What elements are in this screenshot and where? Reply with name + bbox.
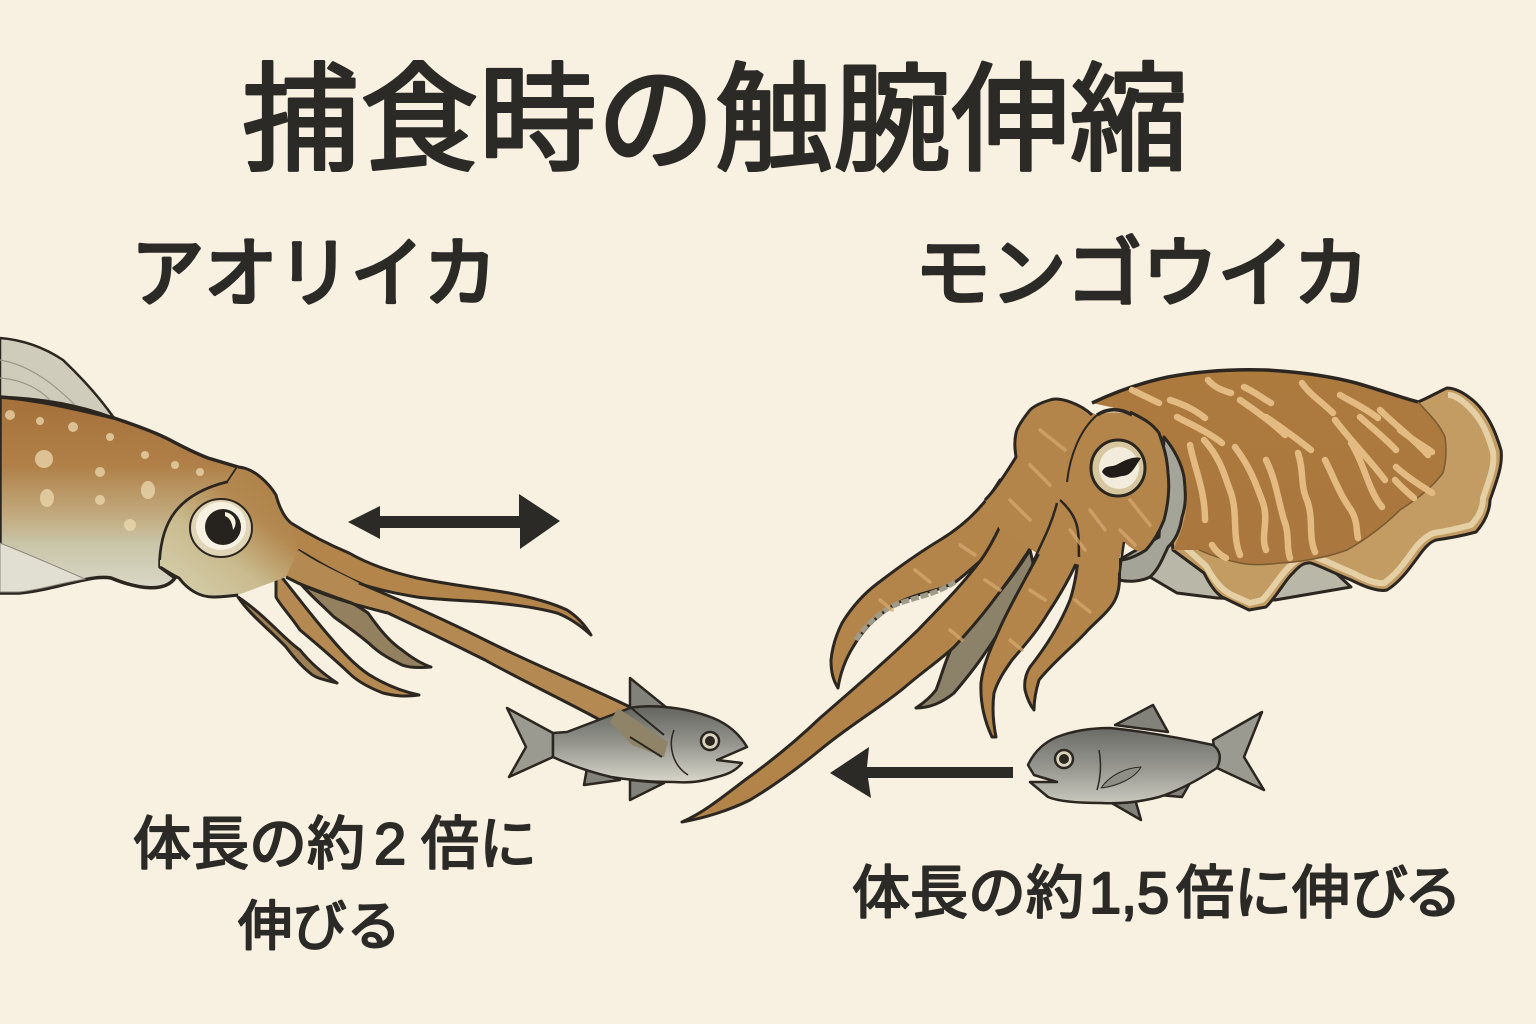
caption: アオリイカ: 体長の約2倍に xyxy=(133,812,537,877)
upper fin xyxy=(0,338,114,418)
gill xyxy=(671,730,688,775)
dorsal fin xyxy=(630,678,667,708)
dorsal fin xyxy=(1115,705,1168,732)
mantle xyxy=(1092,370,1446,564)
tail xyxy=(507,708,553,777)
eye xyxy=(1055,750,1073,768)
squid spots xyxy=(5,410,204,531)
frill outer edge xyxy=(1160,388,1501,610)
left curved arm xyxy=(831,480,1010,688)
upper tentacle xyxy=(291,523,591,635)
long tentacle to fish xyxy=(286,550,664,755)
caption: アオリイカ: 伸びる xyxy=(238,897,401,957)
caption: アオリイカ xyxy=(133,812,537,957)
tail xyxy=(1213,712,1264,790)
belly fins xyxy=(584,768,664,800)
head xyxy=(160,467,340,597)
mantle stripes xyxy=(1132,380,1432,558)
grey collar xyxy=(1119,437,1185,581)
illustration: fish caught xyxy=(507,678,747,800)
illustration: bigfin reef squid xyxy=(0,338,664,755)
head xyxy=(985,399,1169,573)
illustration: fish ahead of cuttlefish xyxy=(1028,705,1264,820)
arm separators xyxy=(1032,500,1124,580)
heading: アオリイカ: アオリイカ xyxy=(131,232,497,317)
title: 捕食時の触腕伸縮 xyxy=(242,55,1188,187)
lower fin xyxy=(0,543,85,592)
long tentacle xyxy=(682,493,1057,822)
gill and pectoral fin xyxy=(1097,750,1100,790)
body xyxy=(1028,728,1220,803)
heading: モンゴウイカ: モンゴウイカ xyxy=(915,232,1369,317)
suckers xyxy=(856,582,955,640)
fin hatching xyxy=(0,360,75,405)
tentacle tip gripping xyxy=(610,708,668,757)
arrow toward tentacle xyxy=(830,747,1013,798)
grey underside xyxy=(1150,530,1351,600)
double arrow xyxy=(348,494,560,549)
illustration: cuttlefish xyxy=(682,370,1501,822)
short arms xyxy=(238,597,337,683)
belly fins xyxy=(1110,783,1190,820)
eye xyxy=(1091,440,1145,496)
arm D xyxy=(1025,545,1120,710)
mantle xyxy=(0,397,238,593)
grey arm xyxy=(916,550,1034,708)
eye xyxy=(190,499,252,557)
body xyxy=(553,706,747,782)
head and arm texture xyxy=(880,430,1150,650)
caption: モンゴウイカ: 体長の約1,5倍に伸びる xyxy=(852,861,1462,926)
arm C xyxy=(981,553,1079,737)
eye xyxy=(701,732,719,750)
